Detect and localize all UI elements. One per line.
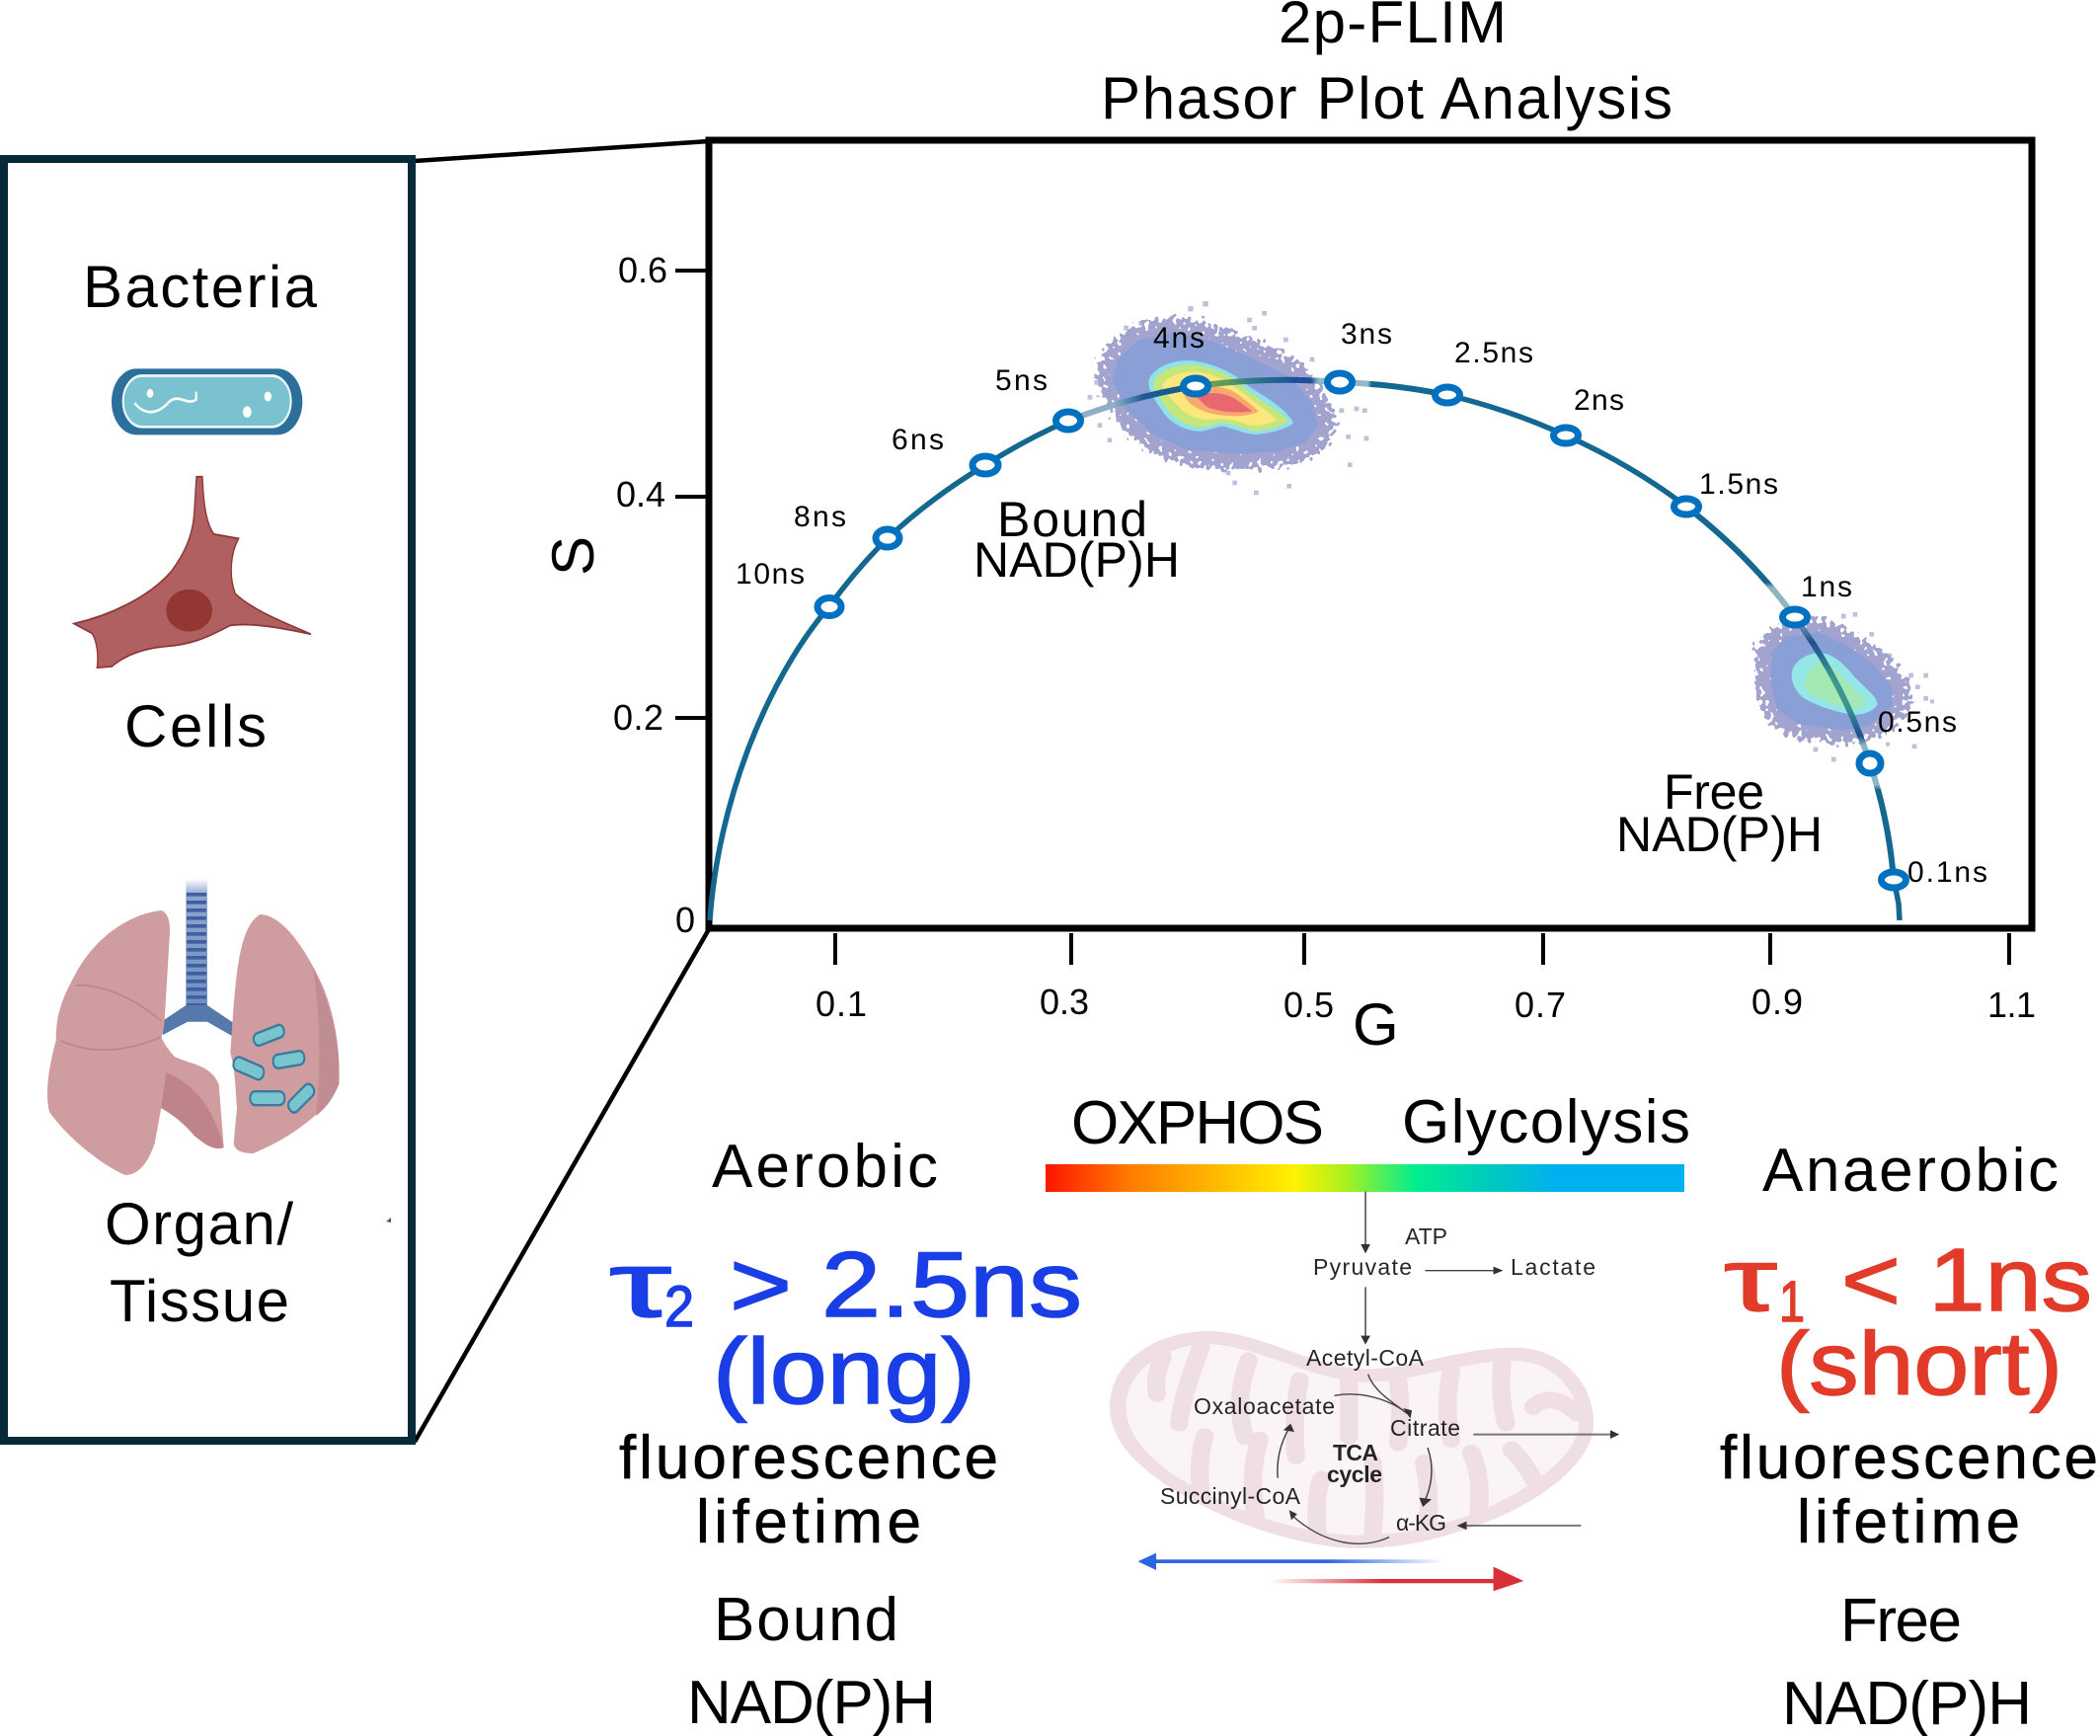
label: OXPHOS: OXPHOS	[1071, 1089, 1324, 1157]
icon: lungs with bacteria	[47, 879, 340, 1175]
text: fluorescence lifetime	[1720, 1424, 2098, 1556]
pathway labels: cycle	[1327, 1461, 1382, 1487]
chart: phasor plot	[709, 140, 2032, 928]
lifetime labels: 1.5ns	[1699, 468, 1778, 501]
diagram: metabolism pathway	[1110, 1192, 1619, 1591]
short lifetime value: τ	[1724, 1231, 1777, 1330]
arc highlight through bound cloud	[1068, 380, 1447, 421]
text: Bound NAD(P)H	[687, 1586, 936, 1736]
long lifetime value: τ	[609, 1232, 671, 1336]
y axis: 0.4	[616, 474, 665, 514]
text: fluorescence lifetime: fluorescence	[1720, 1424, 2098, 1492]
pathway labels: Citrate	[1390, 1415, 1460, 1441]
arc highlight through free cloud	[1686, 507, 1894, 880]
annotation: Bound NAD(P)H: NAD(P)H	[973, 532, 1180, 588]
lifetime labels: 4ns	[1153, 322, 1205, 355]
lifetime labels	[736, 318, 1987, 889]
mitochondrion	[1110, 1331, 1594, 1548]
lifetime labels: 10ns	[736, 558, 805, 591]
text: Free NAD(P)H	[1782, 1587, 2032, 1736]
pathway labels: Oxaloacetate	[1194, 1393, 1335, 1419]
x axis: 0.3	[1040, 982, 1089, 1022]
heading: Aerobic: Aerobic	[712, 1133, 938, 1201]
panel: sample scales	[4, 159, 412, 1441]
zoom connector lines	[415, 141, 709, 1442]
text: fluorescence lifetime: fluorescence	[619, 1424, 998, 1492]
label: Cells: Cells	[124, 693, 267, 759]
long lifetime value	[609, 1232, 1082, 1423]
label: Tissue: Tissue	[110, 1268, 289, 1334]
x axis: 0.7	[1515, 985, 1566, 1025]
text: Free NAD(P)H: Free	[1840, 1587, 1962, 1655]
pathway labels	[1160, 1223, 1595, 1536]
annotation: Free NAD(P)H: Free	[1664, 764, 1764, 820]
y axis: 0.6	[618, 250, 667, 290]
x axis: 1.1	[1987, 985, 2036, 1025]
pathway arrows	[1278, 1192, 1619, 1543]
annotation: Free NAD(P)H: NAD(P)H	[1616, 807, 1823, 862]
pathway labels: Lactate	[1511, 1254, 1595, 1280]
lifetime labels: 2.5ns	[1454, 337, 1533, 369]
y axis: 0.2	[613, 697, 663, 738]
short lifetime value	[1724, 1231, 2092, 1414]
arrow: blue leftward	[1138, 1553, 1444, 1570]
lifetime labels: 2ns	[1574, 384, 1624, 417]
lifetime labels: 1ns	[1801, 571, 1852, 603]
heading: Anaerobic: Anaerobic	[1762, 1137, 2059, 1205]
short lifetime value: (short)	[1776, 1315, 2062, 1414]
pathway labels: TCA	[1333, 1440, 1378, 1465]
annotation: Free NAD(P)H	[1616, 764, 1823, 862]
column: aerobic bound	[609, 1133, 1082, 1736]
x axis: 0.9	[1751, 982, 1803, 1022]
pathway labels: Pyruvate	[1313, 1254, 1412, 1280]
x axis	[816, 933, 2036, 1058]
lifetime labels: 0.5ns	[1878, 706, 1957, 739]
y axis	[540, 250, 709, 940]
annotation: Bound NAD(P)H	[973, 492, 1180, 588]
y axis: 0	[675, 900, 695, 940]
density cloud: bound NAD(P)H	[1088, 301, 1368, 495]
long lifetime value: 2	[664, 1275, 694, 1339]
long lifetime value: > 2.5ns	[730, 1232, 1082, 1336]
pathway labels: ATP	[1405, 1223, 1447, 1249]
icon: bacterium	[112, 368, 302, 434]
axis title: S: S	[540, 536, 606, 576]
lifetime labels: 5ns	[995, 364, 1048, 397]
pathway labels: Acetyl-CoA	[1306, 1345, 1425, 1371]
text: Free NAD(P)H: NAD(P)H	[1782, 1670, 2032, 1736]
density cloud: free NAD(P)H	[1750, 612, 1934, 761]
lifetime labels: 3ns	[1341, 318, 1392, 351]
long lifetime value: (long)	[713, 1319, 975, 1423]
lifetime labels: 6ns	[892, 424, 944, 456]
colour scale bar	[1046, 1164, 1684, 1192]
arrow: red rightward	[1269, 1567, 1523, 1591]
pathway labels: Succinyl-CoA	[1160, 1483, 1301, 1509]
pathway labels: α-KG	[1396, 1510, 1446, 1536]
x axis: 0.5	[1283, 985, 1334, 1025]
icon: cell	[74, 477, 311, 668]
text: Bound NAD(P)H: NAD(P)H	[687, 1669, 936, 1736]
label: Glycolysis: Glycolysis	[1402, 1088, 1690, 1156]
universal semicircle arc	[710, 380, 1900, 920]
text: fluorescence lifetime	[619, 1424, 998, 1556]
stray speck	[386, 1218, 391, 1223]
short lifetime value: 1	[1779, 1270, 1805, 1334]
title: Phasor Plot Analysis: Phasor Plot Analysis	[1101, 65, 1672, 131]
annotation: Bound NAD(P)H: Bound	[997, 492, 1147, 547]
label: Organ/: Organ/	[105, 1191, 293, 1257]
column: anaerobic free	[1720, 1137, 2098, 1736]
text: fluorescence lifetime: lifetime	[696, 1488, 921, 1556]
lifetime labels: 8ns	[794, 501, 846, 533]
short lifetime value: < 1ns	[1841, 1231, 2092, 1330]
label: Bacteria: Bacteria	[83, 254, 318, 320]
text: Bound NAD(P)H: Bound	[714, 1586, 898, 1654]
lifetime markers	[817, 373, 1906, 888]
axis title: G: G	[1353, 991, 1399, 1058]
lifetime labels: 0.1ns	[1907, 856, 1987, 889]
text: fluorescence lifetime: lifetime	[1797, 1488, 2020, 1556]
x axis: 0.1	[816, 984, 867, 1024]
